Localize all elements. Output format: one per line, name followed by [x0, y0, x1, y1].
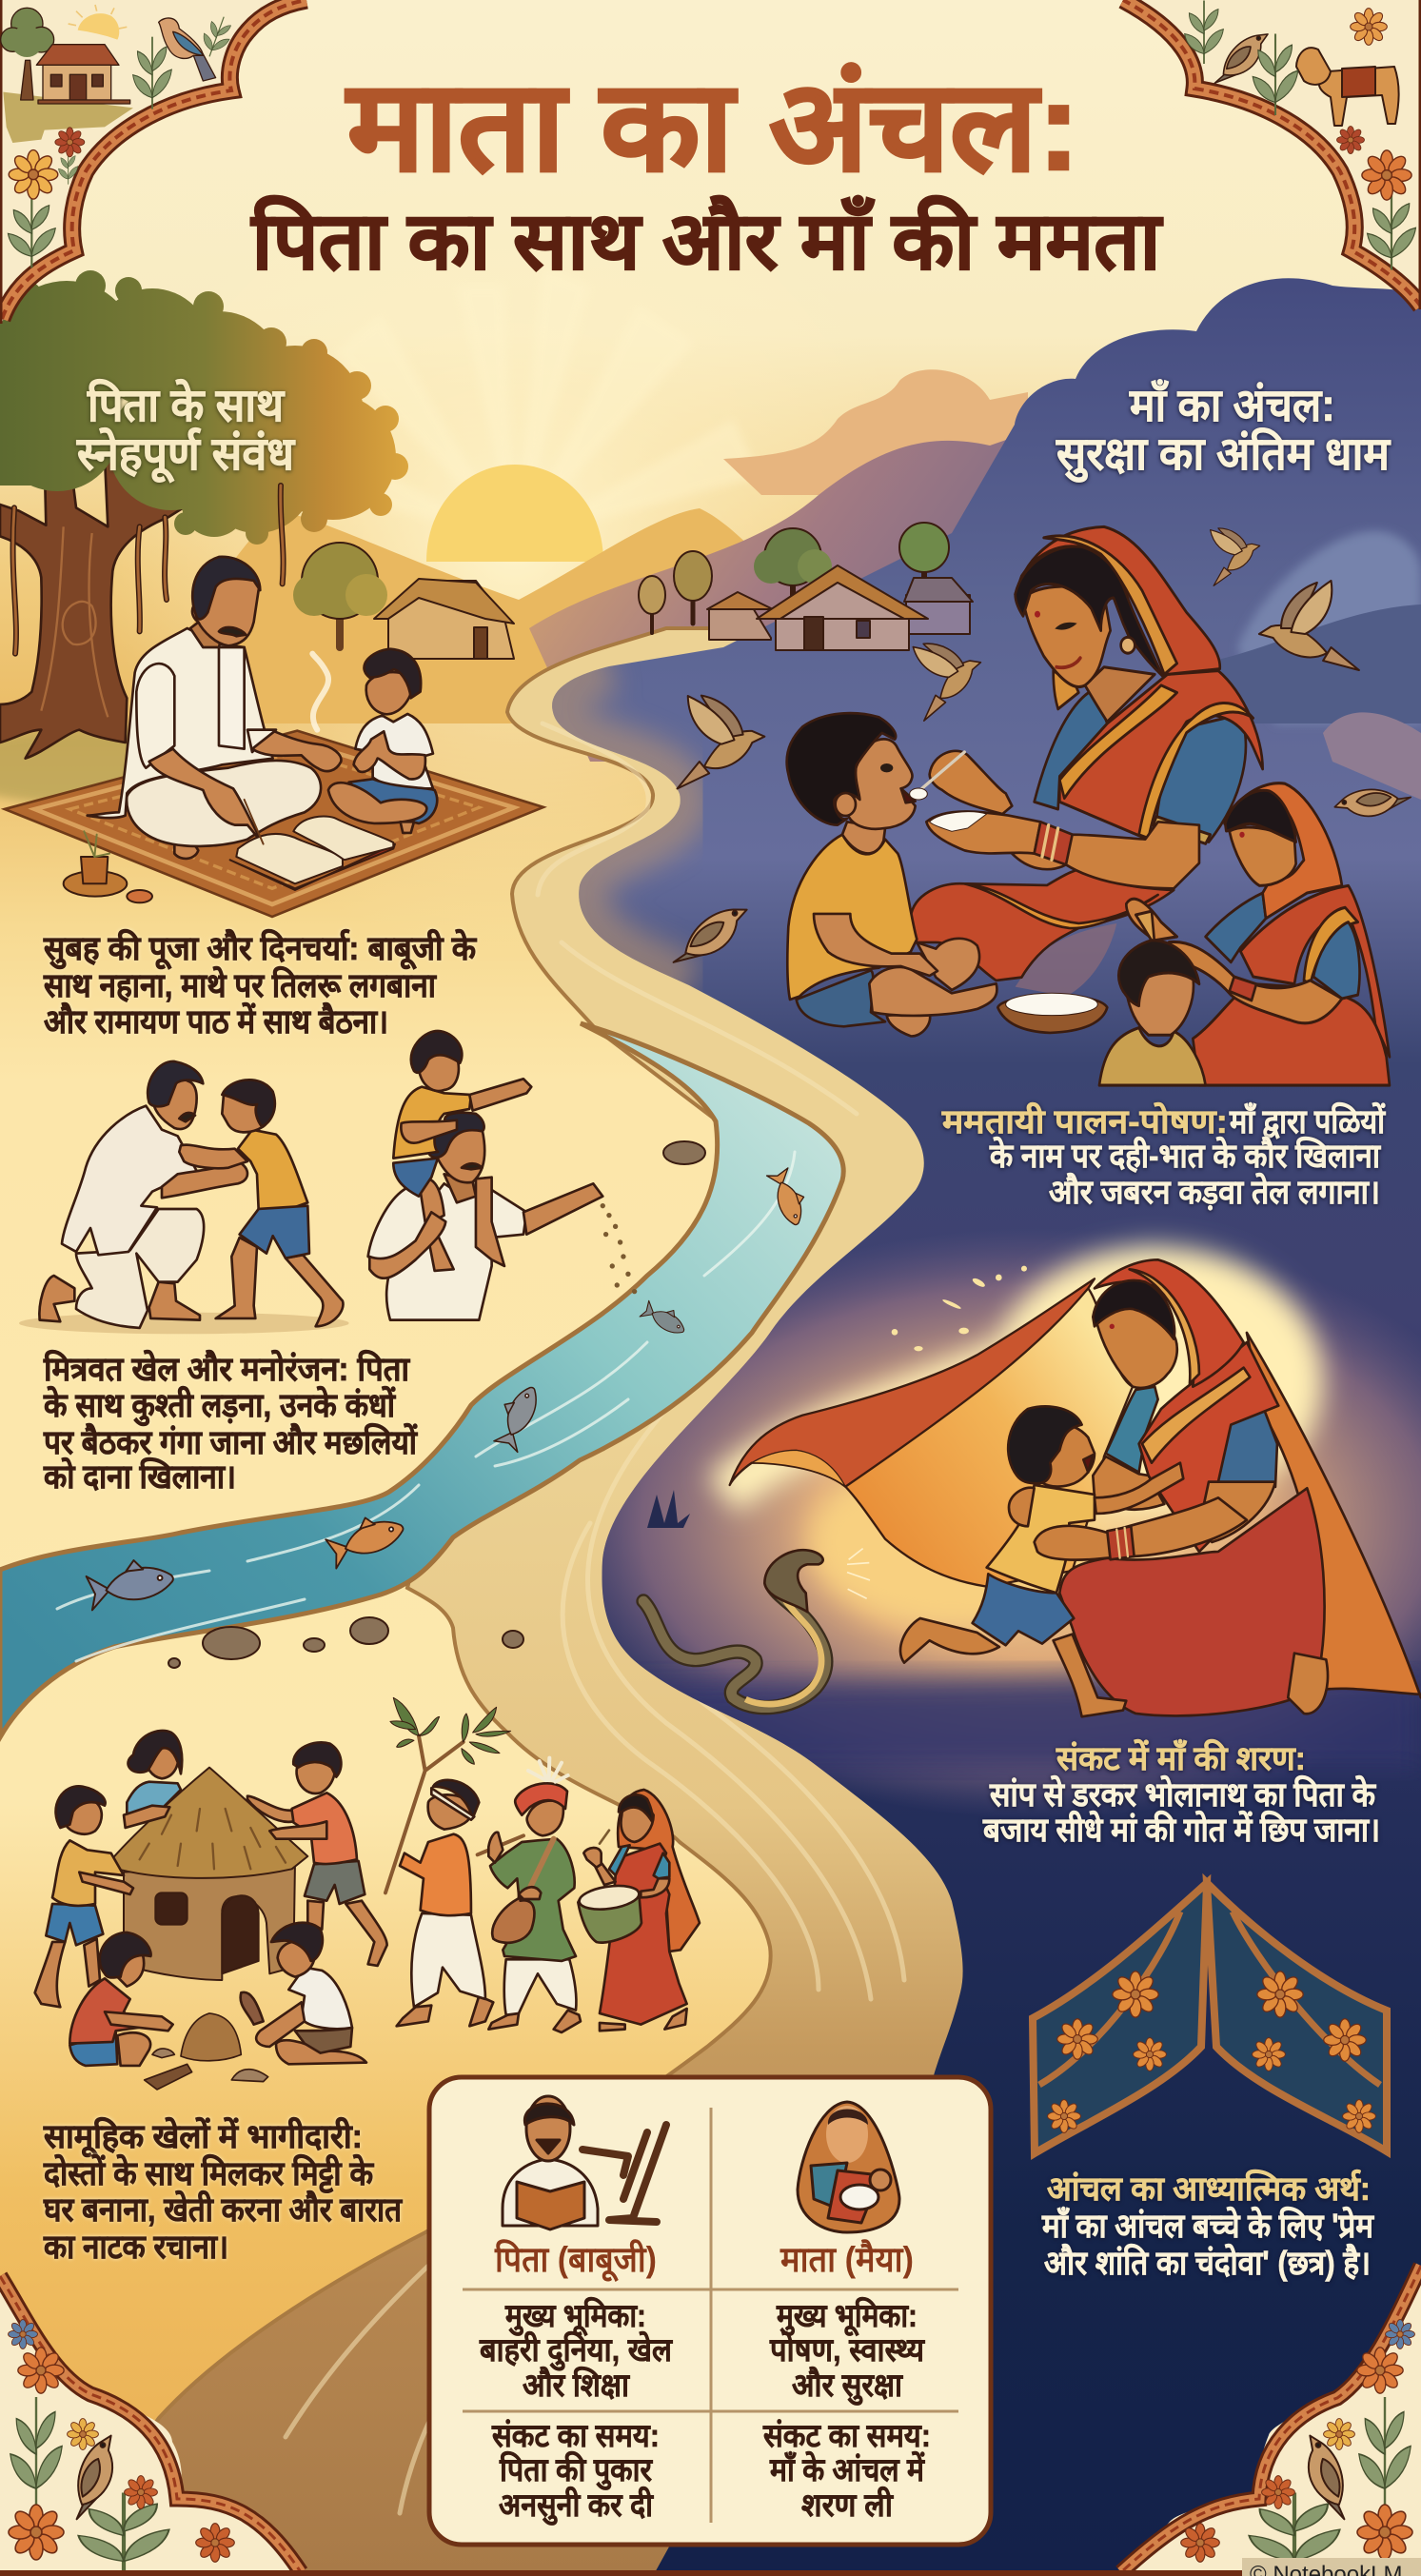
grain falling to fish: [601, 1203, 637, 1294]
cobra snake: [643, 1549, 870, 1708]
father main role: बाहरी दुनिया, खेल: [479, 2330, 674, 2371]
text: group games: [43, 2117, 403, 2266]
scene: boy with turban, flute and instrument: [478, 1758, 581, 2032]
text: refuge in mother during danger: संकट में माँ की शरण:: [1056, 1739, 1306, 1777]
night-blue region: mother's side: [476, 267, 1421, 2576]
boy with leafy branch and headband: [385, 1697, 511, 2026]
birds around mother: [661, 516, 1411, 962]
boy wrestling: [179, 1080, 343, 1326]
hands and arms on thatch: [124, 1796, 326, 1839]
text: friendly play: [43, 1350, 419, 1496]
text: spiritual meaning of the anchal: आंचल का आध्यात्मिक अर्थ:: [1047, 2170, 1371, 2208]
sunrise sun: [426, 465, 603, 562]
text: friendly play: पर बैठकर गंगा जाना और मछलियों: [43, 1423, 419, 1461]
father column header: पिता (बाबूजी): [494, 2239, 657, 2282]
girl in blue blouse: [127, 1731, 182, 1813]
village houses and trees: [293, 523, 973, 659]
text: morning worship: सुबह की पूजा और दिनचर्या: बाबूजी के: [43, 929, 477, 970]
left heading: loving bond with father: स्नेहपूर्ण संवंध: [76, 427, 295, 484]
mother main role: मुख्य भूमिका:: [776, 2296, 918, 2337]
text: spiritual meaning of the anchal: [1041, 2170, 1374, 2282]
text: morning worship: साथ नहाना, माथे पर तिलरू लगबाना: [43, 966, 438, 1004]
right heading: mother's lap, the last refuge: माँ का अंचल:: [1129, 379, 1335, 431]
father seated in white kurta: [88, 557, 341, 859]
text: friendly play: के साथ कुश्ती लड़ना, उनके कंधों: [43, 1386, 397, 1426]
golden halo around mother: [723, 1247, 1323, 1628]
mother oiling boy's hair: [1099, 783, 1390, 1085]
stones on the river bank: [168, 1141, 705, 1668]
decorative corner: top right: [1123, 0, 1421, 309]
text: morning worship: और रामायण पाठ में साथ बैठना।: [44, 1002, 388, 1040]
text: loving nurture: माँ द्वारा पळियों: [1229, 1102, 1387, 1140]
text: morning worship: [43, 929, 477, 1040]
mother's lap and forearm: [911, 751, 1199, 997]
icon: right corner bird: [1206, 32, 1276, 83]
scene: woman with dholak: [578, 1790, 700, 2031]
mother in crisis: शरण ली: [801, 2486, 894, 2524]
decorative corner: bottom right: [1121, 2266, 1421, 2576]
scene: child runs to mother, snake and sheltering veil: [643, 1247, 1421, 1716]
lap and arm of mother, child being fed: [787, 713, 1199, 1036]
sparkles: [892, 1266, 1027, 1351]
text: group games: का नाटक रचाना।: [43, 2229, 228, 2266]
icon: right bottom flowers and leaves: [1181, 2320, 1414, 2574]
puja plate with tulsi: [64, 831, 152, 902]
decorative corner: top left: [0, 0, 306, 324]
father in crisis: संकट का समय:: [491, 2418, 660, 2454]
mother main role: पोषण, स्वास्थ्य: [769, 2330, 925, 2368]
watermark: [1242, 2558, 1421, 2576]
main title: पिता का साथ और माँ की ममता: [249, 195, 1164, 286]
sand road running through the page: [95, 628, 1047, 2576]
father carrying child on shoulders: [368, 1031, 602, 1320]
main title: माता का अंचल:: [345, 56, 1080, 196]
left heading: loving bond with father: पिता के साथ: [87, 379, 286, 431]
father main role: मुख्य भूमिका:: [504, 2296, 646, 2337]
mother main role: और सुरक्षा: [792, 2366, 903, 2406]
boy sitting cross-legged: [787, 713, 997, 1036]
text: group games: सामूहिक खेलों में भागीदारी:: [43, 2117, 363, 2158]
right heading: mother's lap, the last refuge: [1056, 379, 1391, 483]
text: group games: घर बनाना, खेती करना और बारात: [43, 2190, 403, 2229]
father in crisis: अनसुनी कर दी: [499, 2486, 654, 2526]
decorative corner: bottom left: [0, 2276, 301, 2576]
banyan tree: [0, 270, 408, 804]
father main role: [479, 2296, 674, 2404]
text: friendly play: मित्रवत खेल और मनोरंजन: पिता: [43, 1350, 411, 1388]
road wheel tracks: [286, 723, 904, 2513]
mother in crisis: माँ के आंचल में: [769, 2450, 925, 2488]
text: refuge in mother during danger: [982, 1739, 1380, 1849]
prayer mat: [5, 731, 543, 917]
father in crisis: पिता की पुकार: [499, 2450, 653, 2490]
right heading: mother's lap, the last refuge: सुरक्षा का अंतिम धाम: [1056, 427, 1391, 483]
bottom border strip: [0, 2570, 1421, 2576]
scene: morning puja with father: [5, 557, 543, 917]
rice bowl on ground: [997, 993, 1107, 1033]
comparison table panel: [429, 2077, 991, 2545]
scene: mother feeding child: [661, 516, 1411, 1085]
kneeling father: [39, 1061, 247, 1328]
river with fish: [0, 1023, 843, 1737]
icon: small village house with tree, sun, bird: [1, 5, 236, 268]
icon: left corner flowers and leaves: [9, 2320, 234, 2574]
scene: wrestling and shoulder ride with father: [19, 1031, 637, 1334]
text: friendly play: को दाना खिलाना।: [43, 1457, 236, 1496]
right hanging drape of sari: [1247, 1333, 1421, 1697]
text: loving nurture: ममतायी पालन-पोषण:: [941, 1102, 1228, 1140]
left heading: loving bond with father: [76, 379, 295, 484]
warm glow behind refuge scene: [602, 1240, 1421, 1810]
mother kneeling in red sari: [1059, 1259, 1328, 1715]
text: loving nurture: [941, 1102, 1387, 1211]
boy clinging to mother: [900, 1406, 1247, 1716]
crouching child in red: [69, 1932, 173, 2066]
mother in crisis: संकट का समय:: [762, 2418, 931, 2454]
mother upper body with red sari: [1016, 526, 1263, 843]
text: refuge in mother during danger: सांप से डरकर भोलानाथ का पिता के: [989, 1775, 1376, 1813]
text: loving nurture: और जबरन कड़वा तेल लगाना।: [1049, 1173, 1380, 1211]
mother in crisis: [762, 2418, 931, 2524]
text: spiritual meaning of the anchal: और शांति का चंदोवा' (छत्र) है।: [1044, 2244, 1371, 2282]
icon: right corner flowers and leaves: [1185, 1, 1416, 270]
father in crisis: [491, 2418, 660, 2526]
icon: father with book and plough: [503, 2096, 666, 2229]
text: spiritual meaning of the anchal: माँ का आंचल बच्चे के लिए 'प्रेम: [1041, 2207, 1374, 2245]
icon: left corner bird: [49, 2434, 138, 2519]
icon: right corner bottom bird: [1283, 2434, 1372, 2519]
mud pile, stones and sticks: [145, 2013, 268, 2090]
sheltering veil: [730, 1278, 1133, 1587]
boy with folded hands: [328, 649, 437, 833]
distant hills and sky on the right: [190, 369, 1421, 762]
text: group games: दोस्तों के साथ मिलकर मिट्टी के: [43, 2154, 374, 2193]
mother column header: माता (मैया): [780, 2239, 914, 2279]
child in yellow shirt: [35, 1786, 133, 2007]
open book: [230, 800, 395, 890]
icon: ornamented cow: [1296, 48, 1399, 126]
boy in orange shirt, behind hut: [292, 1742, 387, 1966]
father main role: और शिक्षा: [523, 2366, 630, 2404]
mother main role: [769, 2296, 925, 2406]
dark grass tuft: [647, 1490, 690, 1528]
crouching child in white: [241, 1923, 366, 2064]
text: refuge in mother during danger: बजाय सीधे मां की गोत में छिप जाना।: [982, 1811, 1380, 1849]
pale blue hills behind mother: [1180, 531, 1421, 800]
incense smoke: [312, 654, 328, 730]
scene: children playing with mud hut: [35, 1697, 511, 2090]
embroidered anchal canopy: [1033, 1883, 1387, 2153]
icon: mother with baby: [798, 2102, 899, 2232]
text: loving nurture: के नाम पर दही-भात के कौर खिलाना: [989, 1137, 1382, 1175]
mud hut: [107, 1768, 307, 1980]
main title: [249, 56, 1164, 286]
